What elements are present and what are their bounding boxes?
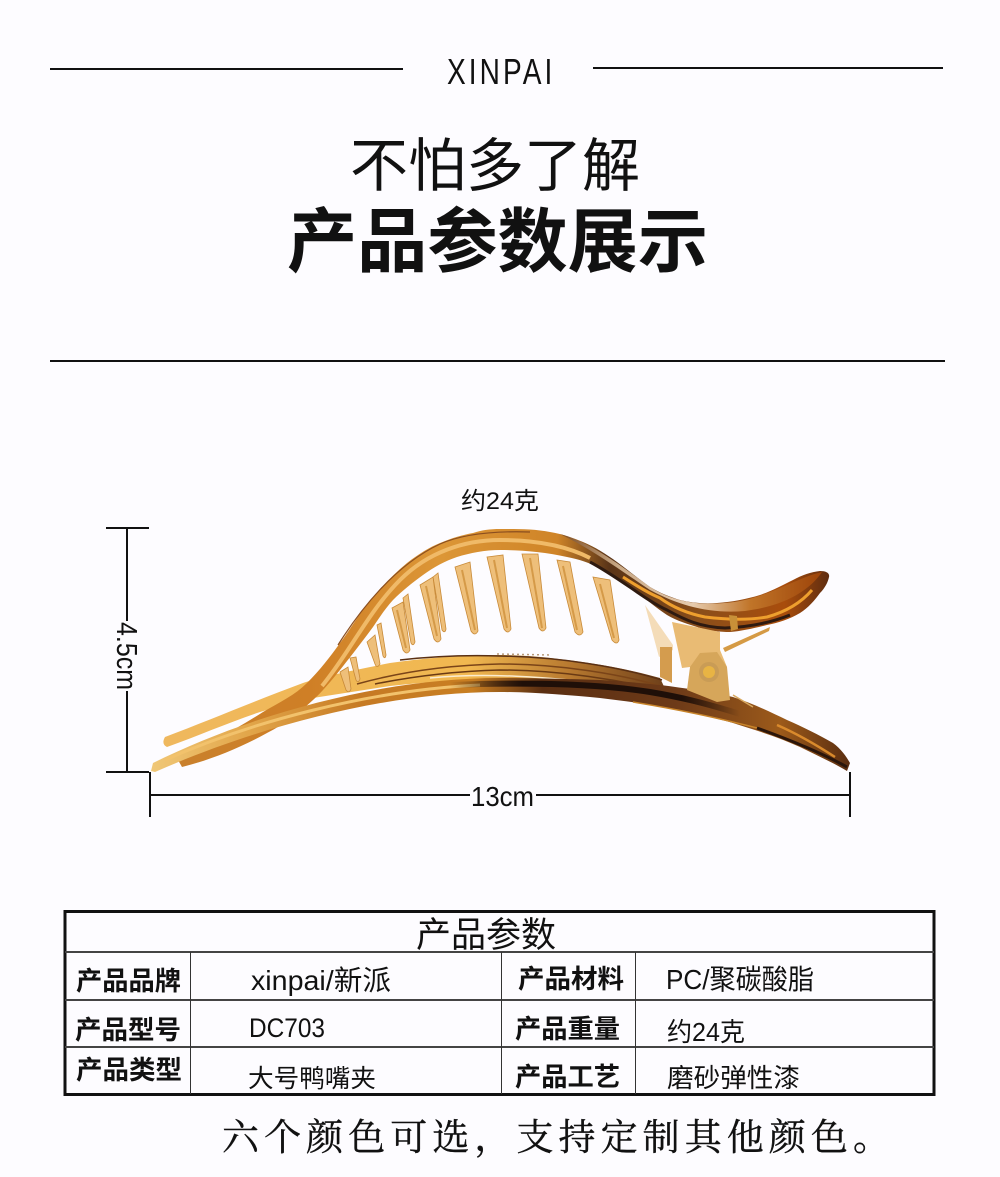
row: model: 产品型号: [75, 1015, 181, 1045]
rear rail: [163, 654, 668, 747]
weight label: 约24克: [461, 488, 539, 515]
section divider: [50, 360, 945, 362]
parameter table: [65, 912, 934, 1094]
width dimension: 13cm: [471, 781, 534, 812]
row: type: 产品类型: [76, 1055, 182, 1085]
clip teeth: [340, 554, 619, 692]
row: model: DC703: [249, 1013, 325, 1043]
row: brand: [76, 964, 814, 996]
upper arm: [178, 529, 829, 767]
row: type: 大号鸭嘴夹: [248, 1065, 376, 1093]
hair clip product illustration: [151, 529, 850, 772]
title line 1: 不怕多了解: [350, 134, 640, 199]
header rule right: [593, 67, 943, 69]
row: model: 约24克: [667, 1017, 745, 1047]
row: brand: xinpai/新派: [251, 965, 391, 996]
brand name: XINPAI: [447, 52, 552, 92]
header rule left: [50, 68, 403, 70]
row: model: 产品重量: [515, 1014, 620, 1044]
table heading: 产品参数: [416, 916, 556, 955]
height dimension: 4.5cm: [110, 622, 142, 690]
row: brand: 产品品牌: [76, 966, 181, 996]
row: brand: PC/聚碳酸脂: [666, 964, 814, 995]
row: type: 磨砂弹性漆: [667, 1063, 800, 1093]
title line 2: 产品参数展示: [287, 203, 708, 281]
row: type: [76, 1055, 800, 1093]
pale hinge plate: [645, 605, 673, 657]
metal hinge bracket: [660, 615, 770, 707]
colour options note: 六个颜色可选，支持定制其他颜色。: [222, 1117, 890, 1159]
row: brand: 产品材料: [518, 964, 624, 994]
row: type: 产品工艺: [515, 1062, 620, 1092]
lower jaw: [151, 678, 850, 772]
row: model: [75, 1013, 745, 1047]
